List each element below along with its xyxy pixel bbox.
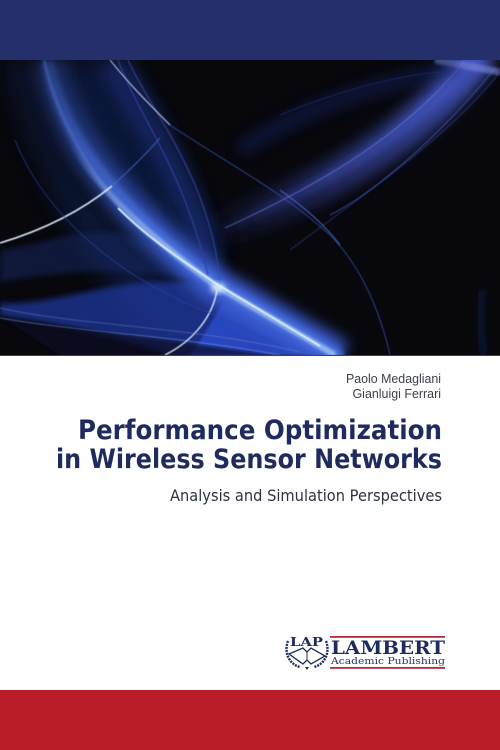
bottom red band bbox=[0, 690, 500, 750]
left mid sheets bbox=[0, 230, 184, 284]
logo emblem: LAP book and laurel bbox=[286, 635, 328, 670]
book title: Performance Optimization bbox=[78, 415, 442, 446]
book title: in Wireless Sensor Networks bbox=[56, 444, 442, 475]
top navy band bbox=[0, 0, 500, 60]
cover artwork: blue light streaks bbox=[0, 50, 500, 358]
author names bbox=[346, 372, 441, 401]
lower left thin lines bbox=[15, 140, 280, 345]
long thin arc to the right bbox=[170, 125, 390, 355]
image bottom rule bbox=[0, 355, 500, 356]
logo emblem: LAP book and laurel: LAP bbox=[290, 635, 323, 649]
subtitle: Analysis and Simulation Perspectives bbox=[170, 486, 442, 505]
central ribbon lines bbox=[128, 60, 220, 285]
lens flare at intersection bbox=[211, 283, 225, 293]
right band bbox=[215, 50, 482, 232]
author names: Gianluigi Ferrari bbox=[352, 387, 441, 401]
upper faint sweeps bbox=[240, 68, 460, 150]
bright arc into lower centre bbox=[165, 290, 217, 355]
book title bbox=[56, 415, 442, 475]
main band wide bbox=[50, 60, 340, 358]
far right faint bbox=[480, 290, 485, 355]
central ribbon glow bbox=[98, 60, 222, 285]
logo rules bbox=[330, 636, 445, 638]
logo tagline: Academic Publishing bbox=[330, 656, 445, 667]
bright thin crossing line bbox=[0, 186, 112, 243]
logo wordmark: LAMBERT bbox=[331, 637, 445, 659]
author names: Paolo Medagliani bbox=[346, 372, 441, 386]
publisher logo bbox=[286, 635, 445, 670]
lower left sheet bbox=[0, 282, 345, 355]
wide glow around main band bbox=[4, 60, 212, 341]
